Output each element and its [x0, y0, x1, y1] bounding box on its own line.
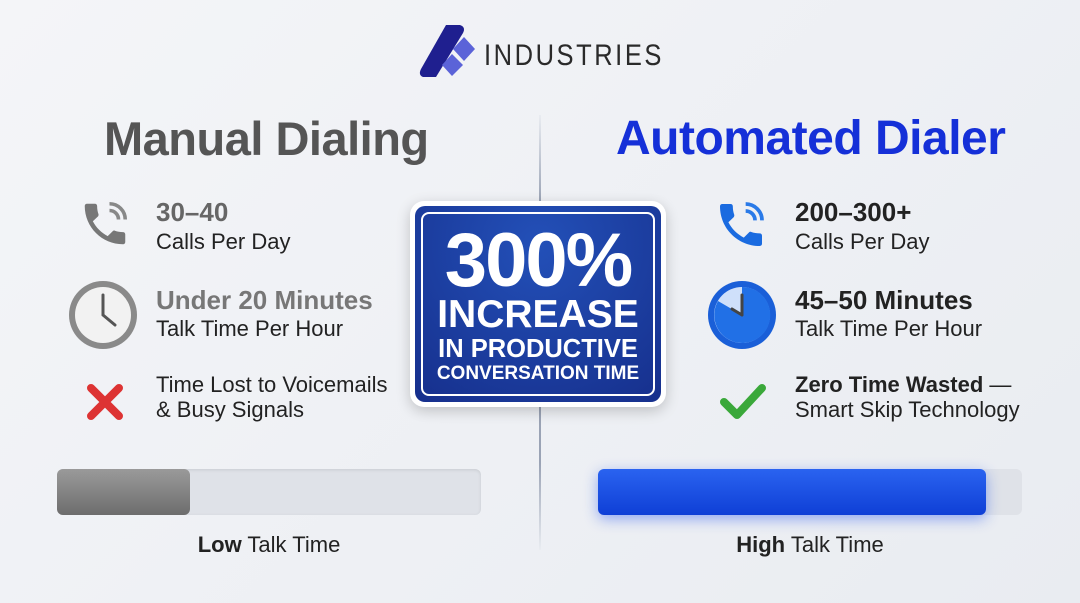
panel: manual stats: Calls Per Day: [156, 229, 290, 254]
panel: automated stats: Calls Per Day: [795, 229, 929, 254]
icon: gray clock: [69, 281, 137, 349]
label: low talk time: Low Talk Time: [198, 532, 340, 557]
bar: low talk time: [57, 469, 481, 515]
label: high talk time: High Talk Time: [736, 532, 884, 557]
callout: 300% increase: IN PRODUCTIVE: [438, 335, 638, 363]
panel: manual stats: [69, 197, 388, 422]
divider: [539, 115, 541, 550]
panel: automated stats: [708, 197, 1020, 422]
logo: INDUSTRIES: [484, 39, 664, 72]
text: 45-50 minutes: 45–50 Minutes: [795, 285, 973, 315]
text: zero time wasted: Zero Time Wasted —: [795, 372, 1011, 397]
heading: Manual Dialing: Manual Dialing: [104, 112, 429, 165]
panel: automated stats: Talk Time Per Hour: [795, 316, 982, 341]
callout: 300% increase: CONVERSATION TIME: [437, 363, 639, 384]
icon: red x: [87, 384, 123, 420]
icon: blue clock: [708, 281, 776, 349]
callout: 300% increase: 300%: [445, 218, 631, 303]
panel: manual stats: Talk Time Per Hour: [156, 316, 343, 341]
text: 200-300+ calls: 200–300+: [795, 197, 911, 227]
callout: 300% increase: [410, 201, 666, 407]
bar: high talk time: [598, 469, 1022, 515]
panel: manual stats: & Busy Signals: [156, 397, 304, 422]
icon: green check: [720, 384, 766, 419]
text: 30-40 calls: 30–40: [156, 197, 228, 227]
text: under 20 minutes: Under 20 Minutes: [156, 285, 373, 315]
callout: 300% increase: INCREASE: [437, 293, 639, 336]
logo: [420, 25, 664, 77]
icon: gray phone: [84, 202, 127, 244]
heading: Automated Dialer: Automated Dialer: [616, 112, 1005, 165]
text: time lost: Time Lost to Voicemails: [156, 372, 388, 397]
icon: blue phone: [720, 202, 764, 246]
panel: automated stats: Smart Skip Technology: [795, 397, 1020, 422]
